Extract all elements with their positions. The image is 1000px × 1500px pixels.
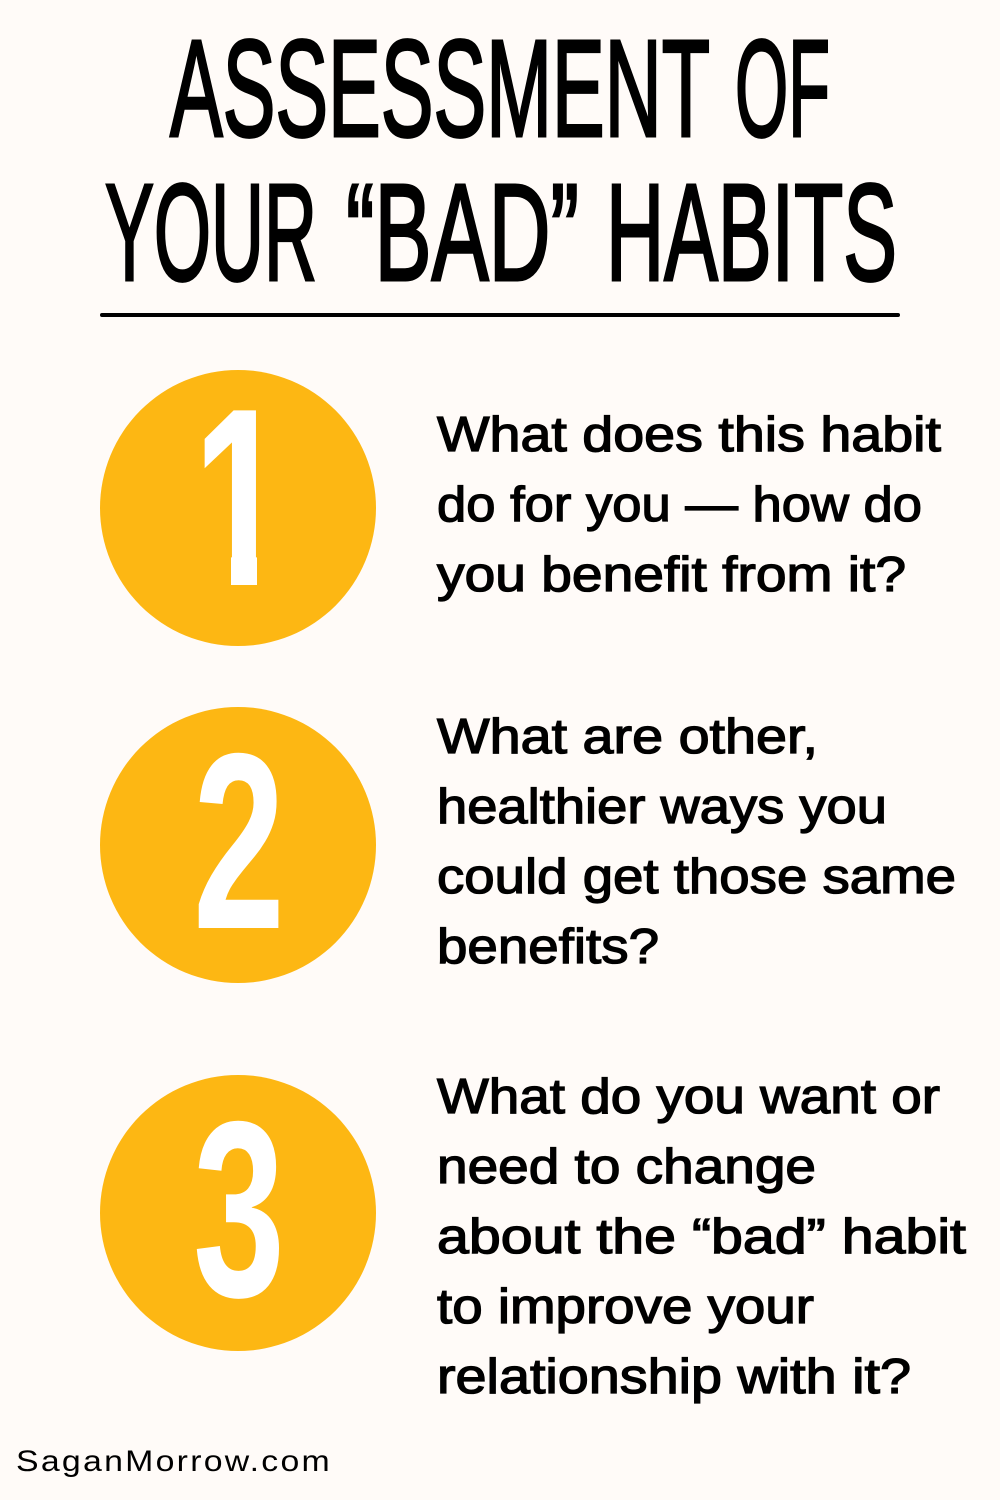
step 2 question: What are other, — [437, 710, 818, 764]
step 3 question: to improve your — [437, 1280, 814, 1334]
step 1 question: do for you — how do — [437, 478, 922, 532]
title: “BAD” — [346, 156, 579, 310]
step 3 question — [437, 1070, 966, 1404]
title: YOUR — [105, 156, 317, 310]
footer website: SaganMorrow.com — [16, 1445, 332, 1478]
step 1 — [100, 358, 941, 646]
title: OF — [735, 12, 830, 166]
step 2 question — [437, 710, 956, 974]
step 2 number badge: 2 — [193, 702, 285, 982]
title — [105, 12, 897, 310]
step 3 number badge: 3 — [193, 1070, 285, 1350]
step 3 question: about the “bad” habit — [437, 1210, 966, 1264]
step 1 question: What does this habit — [437, 408, 941, 462]
step 3 — [100, 1070, 966, 1404]
step 3 question: relationship with it? — [437, 1350, 911, 1404]
step 3 question: What do you want or — [437, 1070, 940, 1124]
step 2 question: healthier ways you — [437, 780, 887, 834]
step 2 question: benefits? — [437, 920, 659, 974]
step 1 number badge: 1 — [194, 358, 286, 638]
step 3 number badge — [100, 1070, 376, 1351]
step 3 question: need to change — [437, 1140, 816, 1194]
step 1 question: you benefit from it? — [437, 548, 906, 602]
step 2 question: could get those same — [437, 850, 956, 904]
step 1 question — [437, 408, 941, 602]
step 2 — [100, 702, 956, 983]
step 1 number badge — [100, 358, 376, 646]
step 2 number badge — [100, 702, 376, 983]
